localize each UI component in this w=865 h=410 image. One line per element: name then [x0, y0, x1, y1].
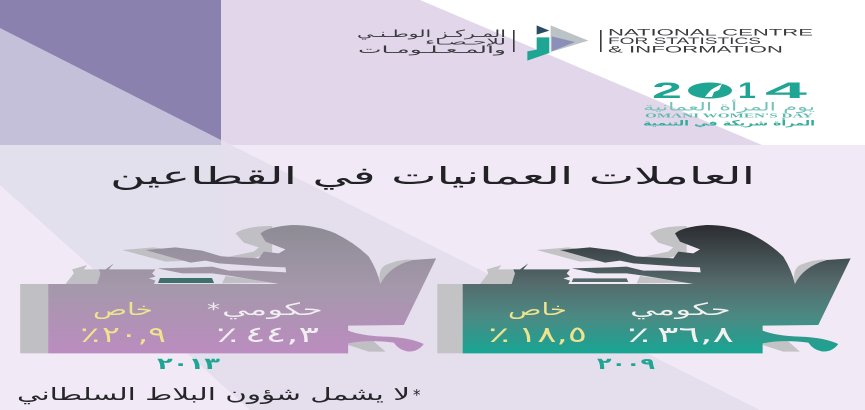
day name english: OMANI WOMEN'S DAY [645, 112, 814, 120]
label: government 2013 [207, 300, 323, 320]
year 2013: ٢٠١٣ [157, 354, 220, 373]
label: government 2013: * [207, 300, 220, 320]
footnote: لا يشمل شؤون البلاط السلطاني [17, 385, 410, 405]
footnote: * [413, 386, 421, 404]
label: government 2013: حكومي [222, 300, 323, 320]
value: government 2009: ٣٦,٨ [657, 323, 734, 348]
label: private 2013: خاص [93, 300, 153, 320]
value: private 2013: ٢٠,٩ [102, 323, 166, 348]
value: private 2013: ٪ [80, 323, 100, 347]
value: government 2013: ٪ [216, 323, 238, 347]
logo arabic name: للإحـصـاء [425, 38, 506, 48]
title: العاملات العمانيات في القطاعين [110, 162, 755, 190]
year 2014: 1 [738, 78, 756, 103]
logo english name: FOR STATISTICS [608, 36, 761, 47]
logo arabic name: والمـعـلـومـات [358, 45, 506, 56]
logo english name: NATIONAL CENTRE [608, 28, 813, 38]
woman at desk 2013 [48, 225, 436, 353]
logo english name [600, 28, 813, 56]
value: government 2013 [216, 323, 319, 348]
woman at desk 2009 [463, 225, 851, 353]
value: private 2009: ٪ [488, 323, 510, 347]
desk item 2013 [158, 278, 214, 283]
value: government 2009: ٪ [627, 323, 650, 347]
label: private 2009: خاص [508, 300, 567, 320]
label: government 2009: حكومي [630, 300, 731, 320]
value: private 2013 [80, 323, 166, 348]
value: government 2013: ٤٤,٣ [245, 323, 319, 348]
year 2014: 2 [652, 78, 682, 103]
year 2014 [652, 78, 810, 103]
value: private 2009 [488, 323, 587, 348]
logo: national centre [357, 25, 813, 61]
slogan: المرأة شريكة في التنمية [643, 118, 815, 128]
silhouette shadow 2009 [437, 226, 827, 353]
panel: 2009 [437, 225, 851, 373]
logo english name: & INFORMATION [608, 44, 783, 56]
logo arabic name [357, 29, 515, 56]
value: private 2009: ١٨,٥ [518, 323, 587, 348]
day name arabic: يوم المرأة العمانية [643, 100, 815, 114]
logo arabic name: المـركـز الوطـنـي [357, 29, 506, 40]
omani women's day 2014 badge [643, 78, 815, 128]
silhouette shadow 2013 [20, 226, 412, 353]
year 2009: ٢٠٠٩ [597, 354, 655, 373]
logo mark [527, 25, 588, 61]
footnote [17, 385, 421, 405]
value: government 2009 [627, 323, 734, 348]
panel: 2013 [20, 225, 436, 373]
year 2014: 4 [765, 78, 810, 103]
